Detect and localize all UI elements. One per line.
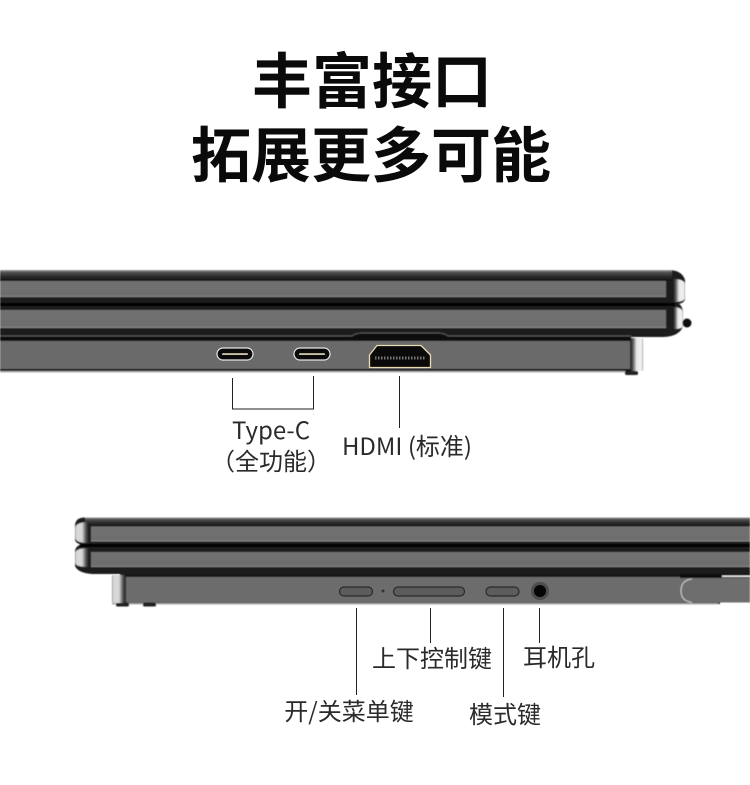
label: power menu key: 开/关菜单键 xyxy=(284,692,414,727)
Type-C bracket line xyxy=(232,376,314,409)
label: Type-C: （全功能） xyxy=(223,442,319,477)
jack leader line xyxy=(538,608,540,643)
icon: Type-C port right xyxy=(294,348,330,360)
icon: audio jack xyxy=(531,582,549,600)
label: mode key: 模式键 xyxy=(469,695,541,730)
title: 丰富接口 xyxy=(252,34,492,121)
power button leader line xyxy=(356,608,358,695)
mode leader line xyxy=(502,608,504,697)
label: HDMI: HDMI (标准) xyxy=(342,427,472,462)
icon: Type-C port left xyxy=(217,348,253,360)
volume leader line xyxy=(430,608,432,643)
icon: volume button xyxy=(394,587,464,596)
label: volume keys: 上下控制键 xyxy=(372,639,492,674)
lower body xyxy=(75,544,750,574)
base xyxy=(0,333,643,375)
label: Type-C xyxy=(223,411,319,477)
laptop side view: Type-C and HDMI ports xyxy=(0,270,692,375)
icon: mode button xyxy=(486,587,519,596)
title: 拓展更多可能 xyxy=(191,108,551,195)
label: Type-C: Type-C xyxy=(232,411,310,446)
title xyxy=(191,34,551,195)
icon: power button xyxy=(340,587,372,596)
top lid xyxy=(75,518,750,545)
label: headphone jack: 耳机孔 xyxy=(523,638,595,673)
laptop side view: buttons and audio jack xyxy=(75,518,750,606)
top lid xyxy=(0,270,685,304)
base xyxy=(112,574,720,606)
hinge xyxy=(680,574,750,602)
device body xyxy=(0,270,692,375)
device body xyxy=(75,518,750,606)
icon: indicator dot xyxy=(382,590,384,592)
lower body xyxy=(0,303,692,337)
HDMI leader line xyxy=(398,376,400,428)
icon: HDMI port xyxy=(370,346,430,368)
